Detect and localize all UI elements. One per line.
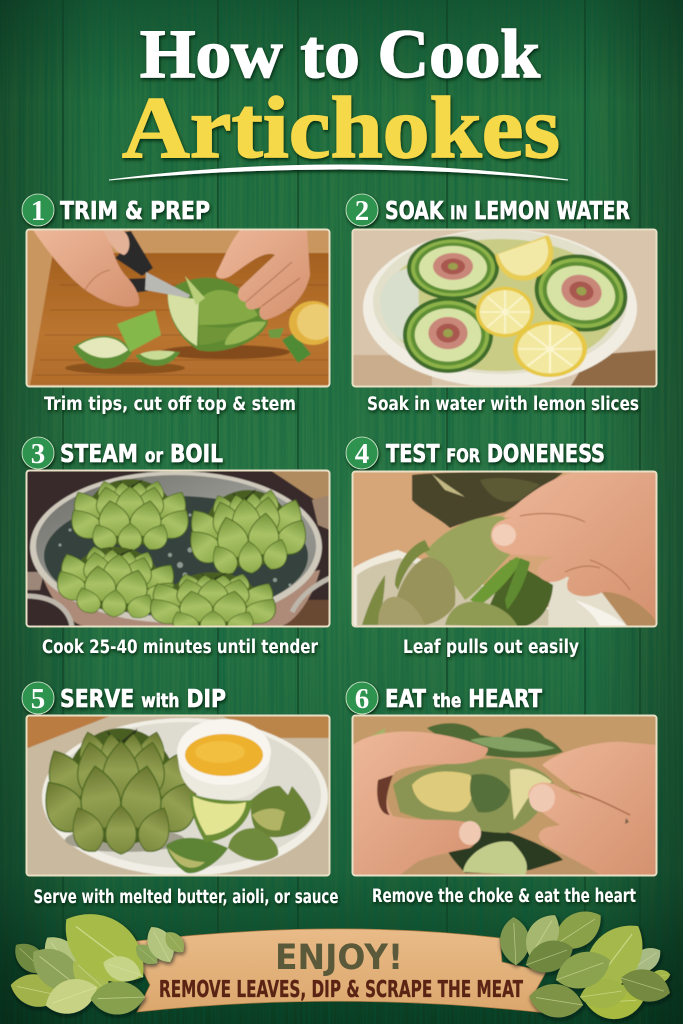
title line: Artichokes: Artichokes [122, 80, 560, 177]
background leaves [427, 723, 563, 758]
artichokes in pot [71, 478, 189, 550]
step 6 heading: EAT the HEART [385, 684, 543, 713]
icon: sage leaves left [7, 896, 189, 1021]
step 1 heading [22, 194, 210, 227]
left hand [33, 230, 139, 307]
title [109, 16, 568, 180]
banner: enjoy ribbon [128, 929, 546, 1013]
bowl [354, 550, 550, 626]
scissors [115, 231, 153, 276]
step 6 heading: 6 [355, 683, 369, 715]
cooked leaves [251, 786, 311, 837]
title line: How to Cook: How to Cook [140, 16, 541, 92]
step 2 heading: 2 [355, 195, 369, 227]
step 6 heading [346, 682, 543, 715]
right hand [528, 742, 657, 875]
step 3 heading [22, 437, 223, 470]
thumbnail [492, 524, 516, 546]
panel 5: serving photo [26, 715, 330, 876]
step 1 heading: 1 [31, 195, 45, 227]
left hand [353, 732, 488, 875]
lemon slices [476, 287, 534, 337]
hand [491, 472, 657, 622]
step 3 caption: Cook 25-40 minutes until tender [42, 637, 319, 658]
banner heading: ENJOY! [275, 938, 403, 978]
step 2 caption: Soak in water with lemon slices [367, 394, 639, 415]
plate [42, 718, 328, 876]
dip bowl [178, 755, 270, 800]
step 1 caption: Trim tips, cut off top & stem [44, 394, 296, 415]
served artichoke [64, 831, 184, 852]
panel 1: trimming photo [26, 229, 337, 387]
panel 4: doneness test photo [352, 471, 657, 627]
pot handles [26, 596, 72, 626]
step 5 heading: 5 [31, 683, 45, 715]
step 2 heading: SOAK IN LEMON WATER [385, 196, 630, 225]
step 3 heading: 3 [31, 438, 45, 470]
pot rim and water [30, 471, 322, 623]
lemon piece [288, 300, 328, 346]
banner subheading: REMOVE LEAVES, DIP & SCRAPE THE MEAT [159, 977, 523, 1003]
panel 2: soaking photo [352, 229, 657, 387]
lemon wedge [190, 793, 252, 842]
step 1 heading: TRIM & PREP [60, 196, 210, 225]
right hand [216, 230, 310, 320]
artichoke heart [393, 758, 553, 833]
step 4 heading [346, 437, 605, 470]
background artichokes [412, 472, 563, 528]
panel 6: eating heart photo [352, 715, 657, 876]
pot body [40, 570, 320, 627]
icon: sage leaves right [499, 901, 675, 1021]
soaking artichoke halves [407, 236, 499, 300]
lemon wedge [495, 235, 553, 281]
step 2 heading [346, 194, 630, 227]
main artichoke leaves [480, 560, 553, 627]
step 5 caption: Serve with melted butter, aioli, or sauce [34, 887, 338, 908]
step 5 heading: SERVE with DIP [60, 684, 226, 713]
bowl [363, 229, 637, 387]
step 4 caption: Leaf pulls out easily [403, 637, 579, 658]
step 4 heading: TEST FOR DONENESS [386, 439, 605, 468]
cut artichoke [168, 278, 268, 351]
title underline swoosh [109, 165, 568, 180]
step 3 heading: STEAM or BOIL [60, 439, 223, 468]
step 4 heading: 4 [355, 438, 369, 470]
cut pieces [73, 336, 132, 369]
panel 3: pot photo [26, 470, 330, 637]
